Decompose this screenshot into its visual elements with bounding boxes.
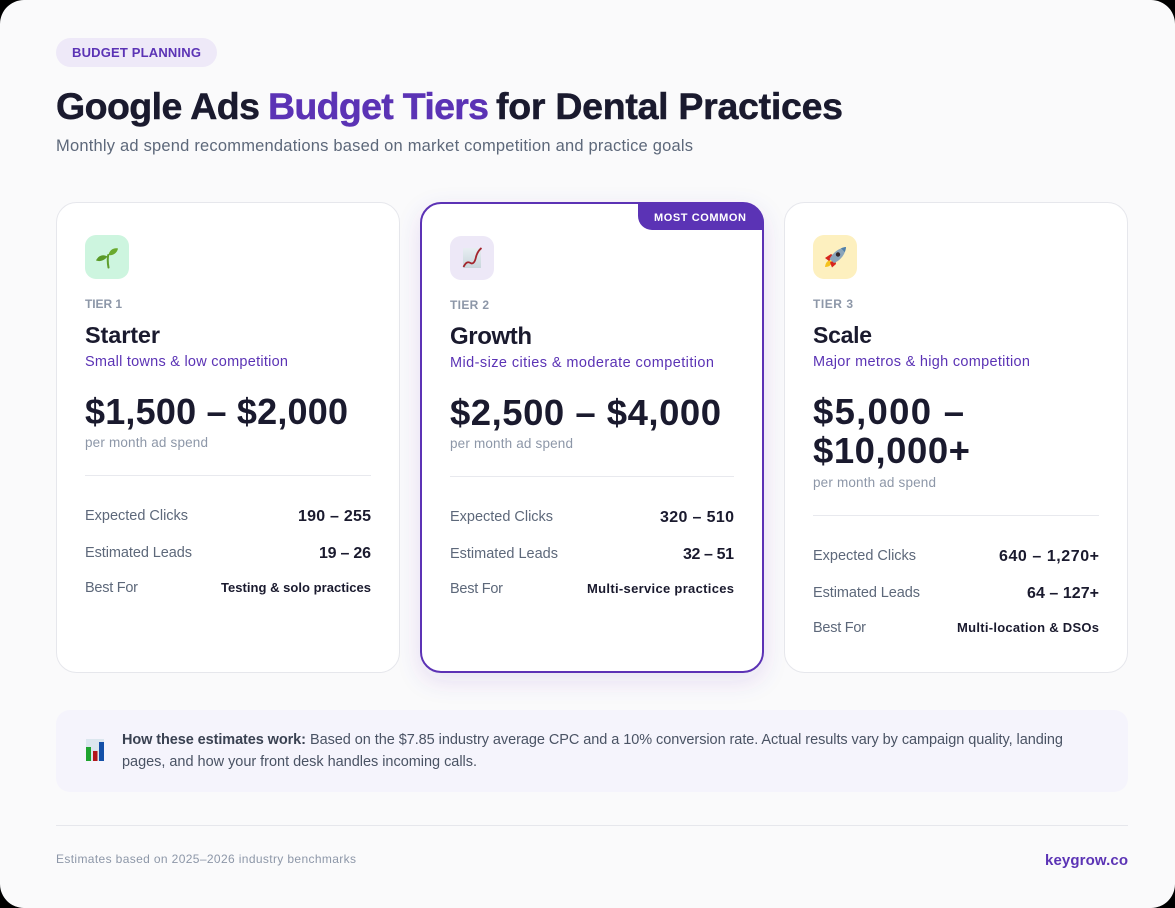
tier label: TIER 2	[450, 298, 489, 312]
metric: best for: Multi-service practices	[587, 581, 734, 596]
callout: how estimates work	[56, 710, 1128, 792]
metric: best for: Best For	[85, 580, 138, 596]
metric: best for: Multi-location & DSOs	[957, 620, 1099, 635]
callout text: Based on the $7.85 industry average CPC and a 10% conversion rate. Actual results vary by campaign quality, landing	[310, 732, 1063, 748]
metric: expected clicks: Expected Clicks	[813, 548, 916, 564]
price: $1,500 – $2,000	[85, 391, 348, 432]
title: for Dental Practices	[496, 85, 843, 127]
tier name: Starter	[85, 322, 160, 348]
metric: best for	[85, 580, 371, 596]
metric: estimated leads	[813, 585, 1099, 602]
subtitle: Monthly ad spend recommendations based on market competition and practice goals	[56, 137, 693, 155]
metric: best for	[813, 620, 1099, 636]
price note: per month ad spend	[85, 435, 208, 450]
callout text: How these estimates work:	[122, 732, 306, 748]
price note: per month ad spend	[450, 436, 573, 451]
icon: chart increasing	[450, 236, 494, 280]
icon: bar chart	[86, 739, 104, 761]
metric: estimated leads: Estimated Leads	[85, 545, 192, 561]
price note: per month ad spend	[813, 475, 936, 490]
title	[56, 85, 843, 127]
metric: estimated leads: Estimated Leads	[813, 585, 920, 601]
metric: best for: Best For	[813, 620, 866, 636]
panel: tier 3 scale	[784, 202, 1128, 672]
metric: best for: Best For	[450, 581, 503, 597]
footer note: Estimates based on 2025–2026 industry benchmarks	[56, 852, 356, 866]
price: $5,000 –	[813, 391, 964, 432]
tier name: Growth	[450, 323, 532, 350]
icon: rocket	[813, 235, 857, 279]
market description: Small towns & low competition	[85, 354, 288, 370]
badge: most common	[638, 203, 764, 230]
price	[813, 391, 970, 471]
metric: expected clicks	[813, 548, 1099, 565]
metric: expected clicks: 190 – 255	[298, 508, 371, 525]
callout text: pages, and how your front desk handles incoming calls.	[122, 754, 477, 770]
metric: best for: Testing & solo practices	[221, 580, 371, 595]
metric: expected clicks	[450, 509, 734, 526]
price: $10,000+	[813, 430, 970, 471]
metric: best for	[450, 581, 734, 597]
title: Google Ads	[56, 85, 260, 127]
metric: expected clicks	[85, 508, 371, 525]
market description: Mid-size cities & moderate competition	[450, 355, 714, 371]
metric: expected clicks: 640 – 1,270+	[999, 548, 1099, 565]
metric: estimated leads	[450, 546, 734, 563]
metric: estimated leads: Estimated Leads	[450, 546, 558, 562]
metric: expected clicks: Expected Clicks	[450, 509, 553, 525]
callout text	[122, 732, 1063, 770]
metric: expected clicks: 320 – 510	[660, 509, 734, 526]
metric: estimated leads: 32 – 51	[683, 546, 734, 563]
icon: sprout	[85, 235, 129, 279]
tier label: TIER 3	[813, 297, 853, 311]
title: Budget Tiers	[268, 85, 489, 127]
panel: tier 1 starter	[56, 202, 400, 672]
panel: tier 2 growth	[421, 203, 764, 672]
metric: estimated leads: 19 – 26	[319, 545, 371, 562]
metric: expected clicks: Expected Clicks	[85, 508, 188, 524]
market description: Major metros & high competition	[813, 354, 1030, 370]
metric: estimated leads: 64 – 127+	[1027, 585, 1099, 602]
header badge	[56, 38, 217, 67]
price: $2,500 – $4,000	[450, 392, 721, 433]
footer brand: keygrow.co	[1045, 852, 1128, 869]
badge: most common: MOST COMMON	[654, 212, 746, 224]
tier label: TIER 1	[85, 297, 122, 311]
metric: estimated leads	[85, 545, 371, 562]
tier name: Scale	[813, 322, 872, 348]
header badge: BUDGET PLANNING	[72, 45, 201, 60]
